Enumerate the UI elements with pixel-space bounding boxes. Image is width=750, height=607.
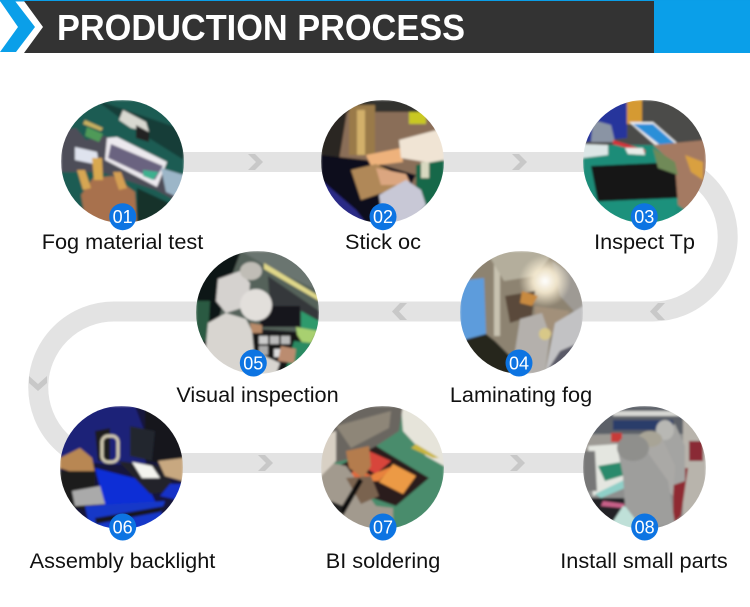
badge 04: 04 bbox=[509, 353, 529, 373]
track arrows bbox=[29, 154, 665, 471]
step 07 bbox=[321, 406, 444, 573]
step 05 bbox=[176, 251, 339, 407]
label 06: Assembly backlight bbox=[30, 548, 215, 573]
step 01 bbox=[42, 100, 203, 254]
label 08: Install small parts bbox=[560, 548, 728, 573]
photo: install small parts bbox=[583, 406, 706, 529]
label 02: Stick oc bbox=[345, 229, 421, 254]
header chevron icon bbox=[0, 1, 35, 52]
photo: stick oc bbox=[321, 100, 444, 223]
badge 02: 02 bbox=[373, 207, 393, 227]
badge 07: 07 bbox=[373, 517, 393, 537]
process track bbox=[38, 162, 728, 463]
badge 05: 05 bbox=[243, 353, 263, 373]
title: PRODUCTION PROCESS bbox=[57, 7, 465, 48]
step 03 bbox=[583, 100, 706, 254]
badge 06 bbox=[109, 514, 136, 540]
label 01: Fog material test bbox=[42, 229, 203, 254]
photo: bi soldering bbox=[321, 406, 444, 529]
badge 02 bbox=[370, 203, 396, 230]
header banner bbox=[0, 0, 750, 53]
badge 01: 01 bbox=[113, 207, 133, 227]
photo: fog material test bbox=[61, 100, 184, 223]
step 02 bbox=[321, 100, 444, 254]
badge 06: 06 bbox=[113, 517, 133, 537]
badge 07 bbox=[370, 514, 396, 540]
header blue block bbox=[654, 1, 750, 53]
badge 08 bbox=[631, 514, 658, 540]
badge 08: 08 bbox=[635, 517, 655, 537]
label 04: Laminating fog bbox=[450, 382, 592, 407]
label 05: Visual inspection bbox=[176, 382, 339, 407]
badge 05 bbox=[240, 350, 267, 376]
photo: assembly backlight bbox=[60, 406, 183, 529]
badge 01 bbox=[109, 203, 136, 230]
label 07: BI soldering bbox=[326, 548, 440, 573]
badge 04 bbox=[506, 350, 532, 376]
badge 03 bbox=[631, 203, 658, 230]
label 03: Inspect Tp bbox=[594, 229, 695, 254]
photo: visual inspection bbox=[196, 251, 319, 374]
step 08 bbox=[560, 406, 728, 573]
step 06 bbox=[30, 406, 215, 573]
photo: inspect tp bbox=[583, 100, 706, 223]
badge 03: 03 bbox=[634, 207, 654, 227]
photo: laminating fog bbox=[460, 251, 583, 374]
step 04 bbox=[450, 251, 592, 407]
header dark bar bbox=[24, 1, 654, 53]
